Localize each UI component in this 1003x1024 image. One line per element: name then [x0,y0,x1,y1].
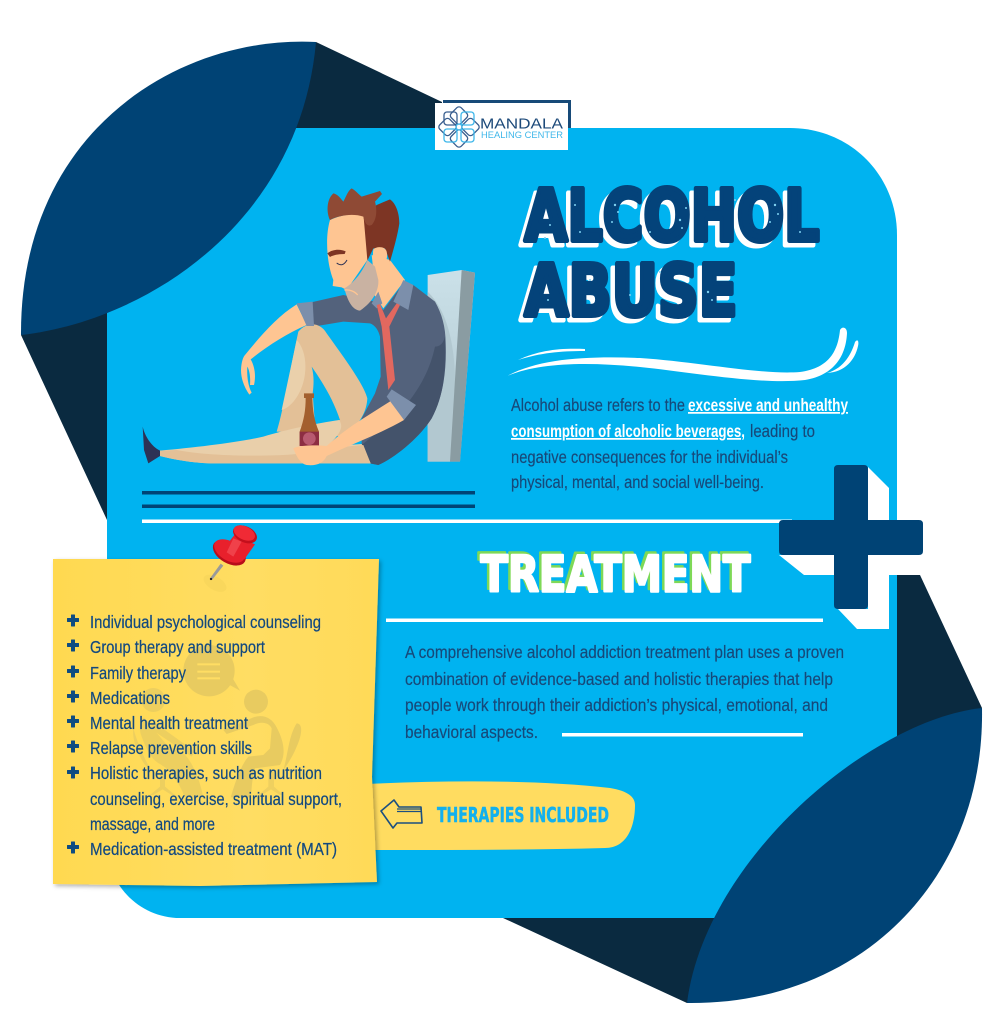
treatment paragraph: A comprehensive alcohol addiction treatment plan uses a proven [405,642,844,662]
list of therapies: Holistic therapies, such as nutrition [90,763,322,783]
speckles [544,199,801,301]
list of therapies: Medications [90,688,170,708]
treatment paragraph: behavioral aspects. [405,722,538,742]
title: Alcohol Abuse: ALCOHOL [524,174,820,258]
title: Alcohol Abuse: ABUSE [524,250,738,332]
list of therapies: Mental health treatment [90,713,248,733]
right arm and hand [293,399,404,465]
treatment paragraph: people work through their addiction’s physical, emotional, and [405,695,828,715]
logo: MANDALA [480,116,563,132]
white rule after paragraph [562,733,803,736]
leaf shape: top-left [21,42,316,335]
plus icon [779,465,923,629]
list of therapies [90,612,342,859]
logo: HEALING CENTER [481,130,563,141]
illustration: man sitting with bottle [143,188,475,465]
intro paragraph: leading to [750,421,815,441]
intro paragraph [511,395,848,492]
neck [372,255,405,308]
collar [372,280,413,310]
heading: Treatment: TREATMENT [478,543,748,601]
icon: arrow [381,800,422,828]
left cuff [297,302,314,326]
title: Alcohol Abuse [520,174,820,337]
divider lines under illustration [142,491,475,508]
right cuff [387,389,416,420]
eyebrow [327,250,346,257]
watermark: counseling figures [133,645,301,797]
main blue panel [107,128,897,918]
shoe [143,427,160,463]
banner: therapies included: THERAPIES INCLUDED [437,803,609,827]
bottle [300,393,319,446]
list of therapies: Individual psychological counseling [90,612,321,632]
background shape: dark upper-left [21,42,442,520]
leaf shape: bottom-right [687,708,982,1003]
list of therapies: Relapse prevention skills [90,738,252,758]
intro paragraph: negative consequences for the individual’s [511,447,788,467]
heading: Treatment: TREATMENT [480,546,750,604]
list of therapies: Group therapy and support [90,637,265,657]
intro paragraph: physical, mental, and social well-being. [511,472,764,492]
list of therapies: counseling, exercise, spiritual support, [90,789,342,809]
closed eye [337,260,347,265]
icon: red push pin [201,522,260,595]
intro paragraph: excessive and unhealthy [688,395,848,415]
tie [377,303,400,390]
sticky note [53,559,379,886]
list of therapies: Medication-assisted treatment (MAT) [90,839,337,859]
intro paragraph: consumption of alcoholic beverages, [511,421,745,441]
ear [373,247,387,267]
background shape: dark lower-right [503,575,982,1003]
plus bullets [68,615,78,853]
raised leg [277,324,367,437]
swoosh [507,328,858,381]
left arm [241,304,307,395]
title: Alcohol Abuse: ALCOHOL [520,179,815,262]
shirt [310,283,446,465]
mouth [344,290,358,295]
wall [428,270,475,462]
list of therapies: Family therapy [90,663,186,683]
white rule under heading [386,618,823,622]
intro paragraph: Alcohol abuse refers to the [511,395,685,415]
logo [435,100,571,150]
face [327,213,367,290]
white divider [142,520,792,523]
hair front [328,188,382,226]
banner: therapies included [368,781,635,850]
list of therapies: massage, and more [90,814,215,834]
treatment paragraph: combination of evidence-based and holistic therapies that help [405,669,833,689]
extended leg [160,420,371,463]
treatment paragraph [405,642,844,742]
hair back [362,199,399,262]
beard [344,260,378,311]
title: Alcohol Abuse: ABUSE [520,254,733,337]
head [327,188,399,311]
icon: mandala [438,106,480,148]
